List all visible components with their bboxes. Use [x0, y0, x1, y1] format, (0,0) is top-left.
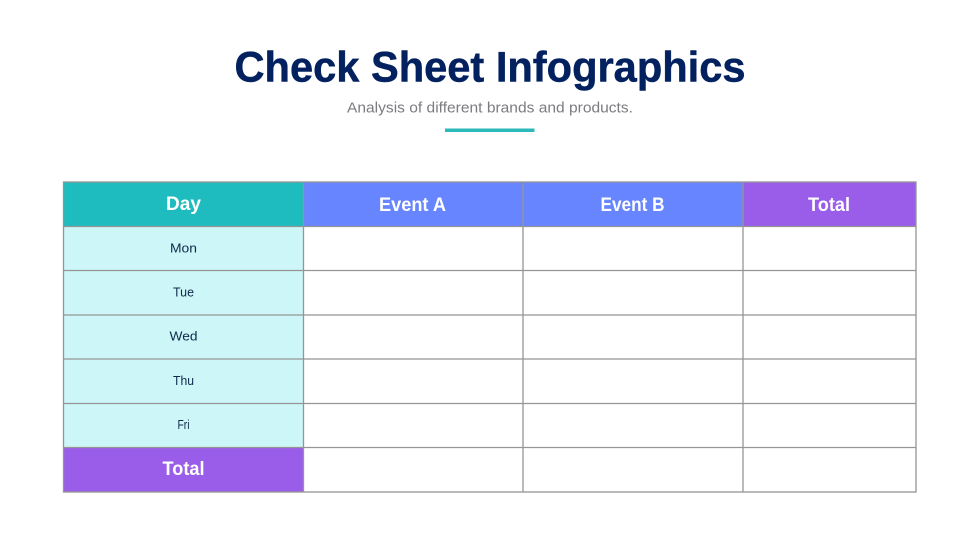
row label: Fri — [64, 404, 304, 448]
row label: Tue — [64, 270, 304, 315]
subtitle: Analysis of different brands and products. — [347, 100, 633, 116]
row label: Wed — [64, 315, 304, 359]
row label: Wed: Wed — [170, 328, 198, 344]
table grid lines — [64, 182, 916, 492]
header cell: Total: Total — [808, 195, 850, 216]
row label: Total: Total — [162, 459, 204, 480]
header cell: Event A — [304, 182, 523, 226]
row label: Total — [64, 448, 304, 492]
row label: Mon: Mon — [170, 240, 197, 256]
row label: Tue: Tue — [173, 284, 194, 300]
row label: Thu — [64, 359, 304, 404]
row label: Mon — [64, 226, 304, 270]
header cell: Event A: Event A — [379, 195, 446, 216]
header cell: Event B: Event B — [600, 195, 664, 216]
accent underline — [445, 128, 534, 132]
header cell: Total — [743, 182, 916, 226]
row label: Fri: Fri — [178, 417, 190, 432]
row label: Thu: Thu — [173, 373, 194, 388]
header cell: Day: Day — [166, 194, 201, 215]
header cell: Event B — [523, 182, 743, 226]
check sheet table — [64, 182, 916, 492]
header cell: Day — [64, 182, 304, 226]
title: Check Sheet Infographics — [234, 44, 746, 92]
